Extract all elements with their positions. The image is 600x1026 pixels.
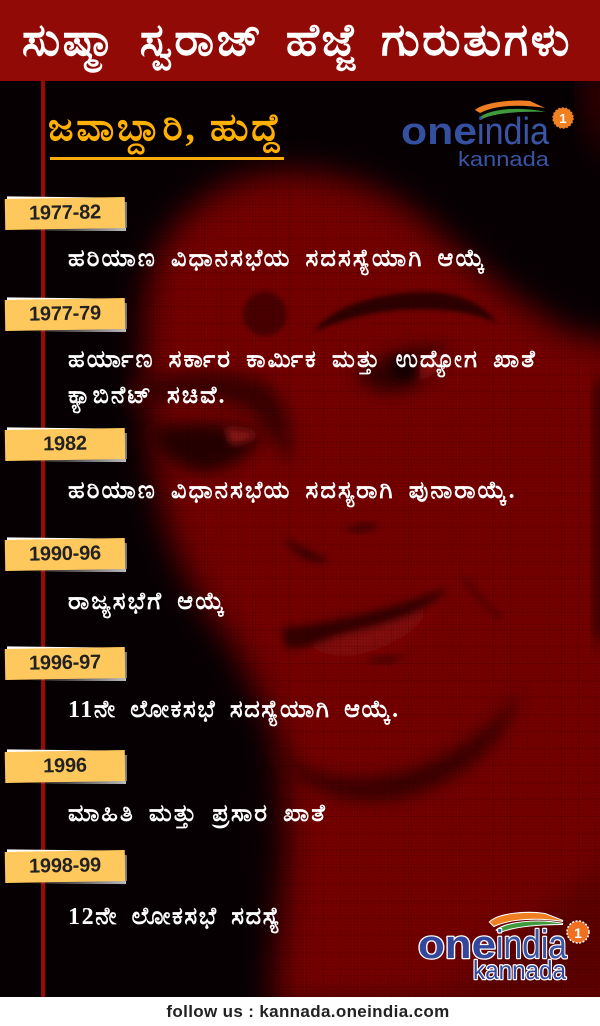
text: 1990-96: ರಾಜ್ಯಸಭೆಗೆ ಆಯ್ಕೆ xyxy=(68,589,226,615)
text: 1977-79: ಕ್ಯಾಬಿನೆಟ್ ಸಚಿವೆ. xyxy=(68,383,227,409)
text: 1996: ಮಾಹಿತಿ ಮತ್ತು ಪ್ರಸಾರ ಖಾತೆ xyxy=(68,801,327,827)
logo: oneindia kannada bottom: kannada xyxy=(473,955,566,985)
logo: oneindia kannada top xyxy=(401,100,574,171)
logo: oneindia kannada bottom: one xyxy=(418,923,496,967)
tag: 1977-82: 1977-82 xyxy=(29,201,101,225)
logo: oneindia kannada bottom: india xyxy=(496,923,568,967)
timeline line xyxy=(41,81,45,997)
tag: 1977-79 xyxy=(4,297,127,332)
logo: oneindia kannada bottom xyxy=(418,912,590,985)
header banner xyxy=(0,0,600,81)
tag: 1998-99 xyxy=(4,849,127,884)
tag: 1977-82 xyxy=(4,196,127,231)
tag: 1982 xyxy=(4,427,127,462)
tag: 1990-96: 1990-96 xyxy=(29,542,101,566)
text: 1982: ಹರಿಯಾಣ ವಿಧಾನಸಭೆಯ ಸದಸ್ಯರಾಗಿ ಪುನಾರಾಯ್ಕೆ. xyxy=(68,478,517,504)
logo: oneindia kannada top: india xyxy=(477,111,550,153)
logo: oneindia kannada top: 1 xyxy=(559,111,567,126)
title: ಸುಷ್ಮಾ ಸ್ವರಾಜ್ ಹೆಜ್ಜೆ ಗುರುತುಗಳು xyxy=(22,15,572,65)
tag: 1998-99: 1998-99 xyxy=(29,854,101,878)
text: 1996-97: 11ನೇ ಲೋಕಸಭೆ ಸದಸ್ಯೆಯಾಗಿ ಆಯ್ಕೆ. xyxy=(68,697,400,723)
tag: 1996: 1996 xyxy=(43,755,87,777)
tag: 1982: 1982 xyxy=(43,433,87,455)
footer xyxy=(0,997,600,1026)
heading underline xyxy=(50,157,284,160)
logo: oneindia kannada top: kannada xyxy=(458,149,550,171)
tag: 1977-79: 1977-79 xyxy=(29,302,101,326)
text: 1977-82: ಹರಿಯಾಣ ವಿಧಾನಸಭೆಯ ಸದಸಸ್ಯೆಯಾಗಿ ಆಯ್ಕೆ xyxy=(68,246,487,272)
logo: oneindia kannada bottom: 1 xyxy=(574,925,582,941)
logo: oneindia kannada top: one xyxy=(401,111,477,153)
section heading: ಜವಾಬ್ದಾರಿ, ಹುದ್ದೆ xyxy=(48,107,284,149)
tag: 1990-96 xyxy=(4,537,127,572)
tag: 1996-97 xyxy=(4,646,127,681)
footer: follow us : kannada.oneindia.com xyxy=(166,1002,450,1021)
facial features xyxy=(130,292,600,1000)
tag: 1996 xyxy=(4,749,127,784)
text: 1977-79 xyxy=(68,347,537,414)
tag: 1996-97: 1996-97 xyxy=(29,651,101,675)
text: 1977-79: ಹರ್ಯಾಣ ಸರ್ಕಾರ ಕಾರ್ಮಿಕ ಮತ್ತು ಉದ್ಯೋಗ ಖಾತೆ xyxy=(68,347,537,373)
text: 1998-99: 12ನೇ ಲೋಕಸಭೆ ಸದಸ್ಯೆ xyxy=(68,904,281,930)
